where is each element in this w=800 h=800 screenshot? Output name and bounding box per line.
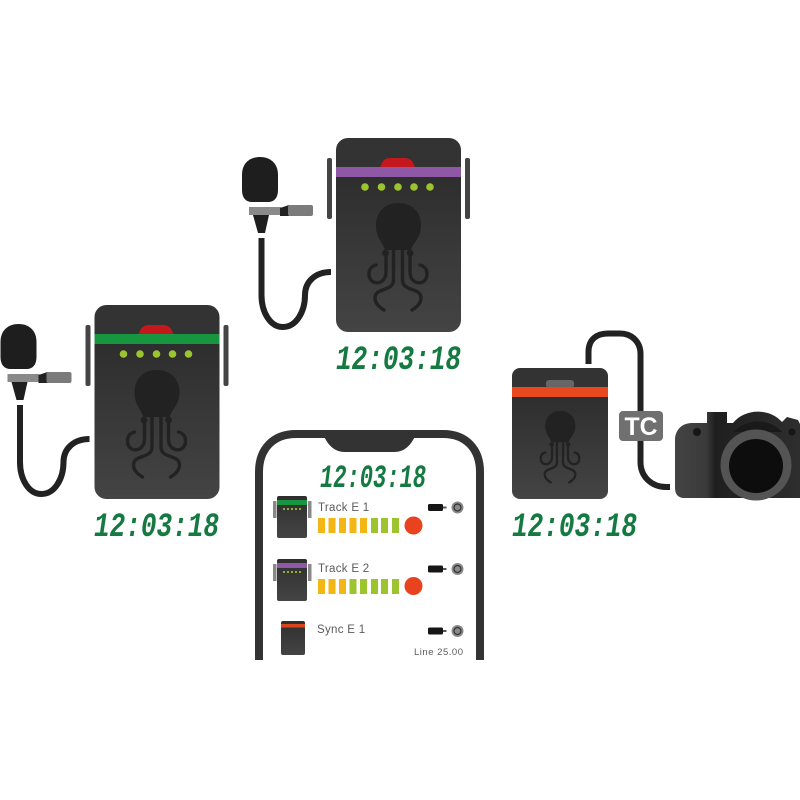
timecode: green unit: 12:03:18 <box>94 509 219 547</box>
recorder unit: purple <box>327 138 470 332</box>
TC badge: TC <box>624 413 658 441</box>
row: Track E 1 <box>273 496 464 538</box>
phone notch <box>323 434 416 452</box>
sync unit: orange <box>512 368 608 499</box>
microphone with cable: purple unit <box>242 157 331 327</box>
camera <box>675 412 800 500</box>
timecode: sync unit: 12:03:18 <box>512 509 637 547</box>
phone frame <box>259 434 480 660</box>
row: Sync E 1: Line 25.00 <box>414 647 463 658</box>
row: Track E 1: Track E 1 <box>318 502 369 514</box>
TC cable <box>588 334 670 487</box>
row: Track E 2: Track E 2 <box>318 563 369 575</box>
row: Sync E 1 <box>281 621 464 658</box>
row: Track E 2 <box>273 559 464 601</box>
microphone with cable: green unit <box>0 324 90 494</box>
phone <box>259 434 480 660</box>
phone timecode: 12:03:18 <box>320 460 426 497</box>
timecode: purple unit: 12:03:18 <box>336 342 461 380</box>
recorder unit: green <box>86 305 228 499</box>
row: Sync E 1: Sync E 1 <box>317 624 365 636</box>
